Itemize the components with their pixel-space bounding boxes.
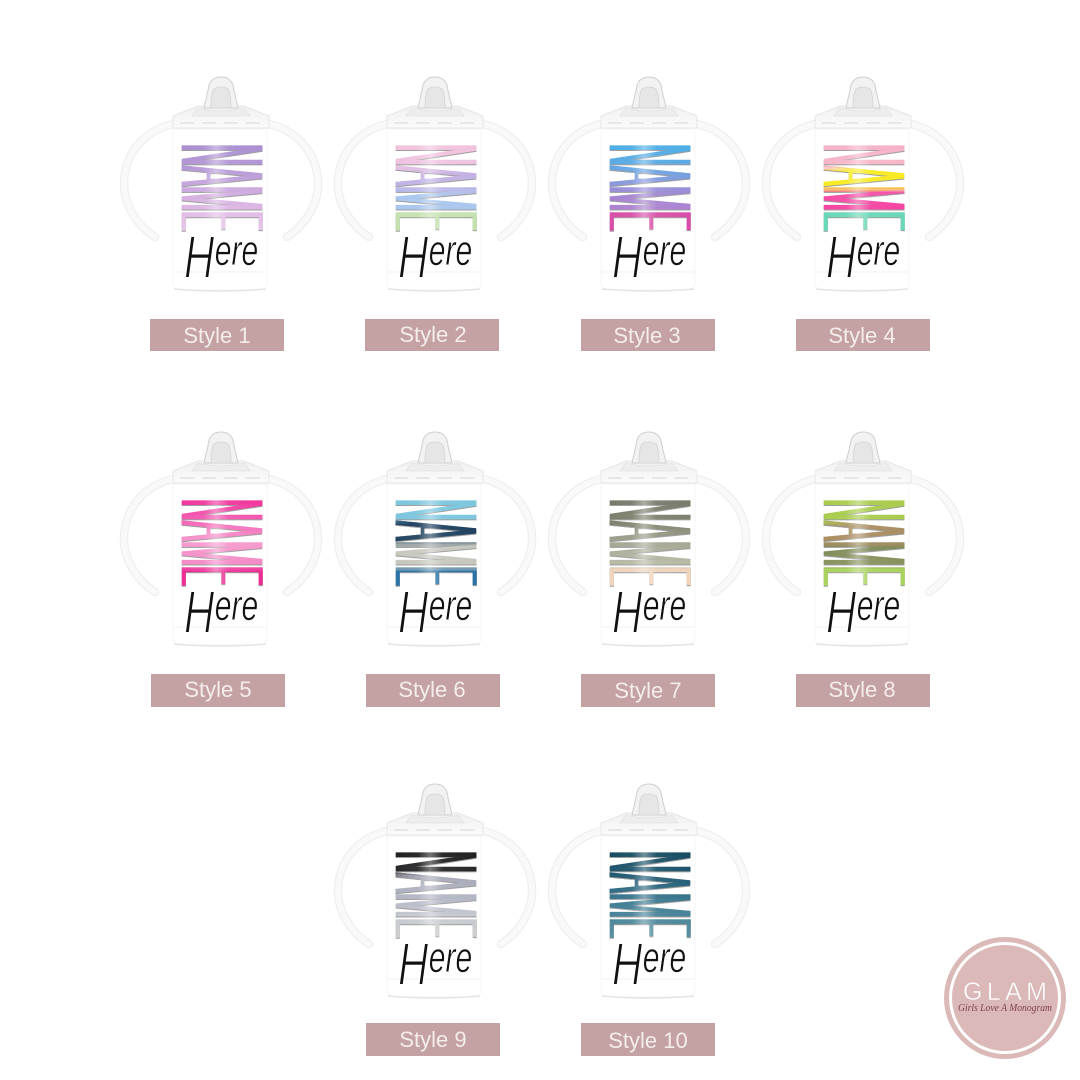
- label: style 2: Style 2: [399, 322, 467, 347]
- label: style 10: [581, 1023, 715, 1056]
- cup: style 4: [766, 77, 960, 291]
- cup: style 3: H: [612, 224, 643, 291]
- cup: style 5: H: [184, 579, 215, 646]
- cup: style 7: [552, 432, 746, 646]
- label: style 10: Style 10: [608, 1028, 688, 1053]
- label: style 3: Style 3: [613, 323, 681, 348]
- label: style 4: [796, 319, 930, 351]
- logo: GLAM badge: Girls Love A Monogram: [958, 1003, 1052, 1014]
- cup: style 8: [766, 432, 960, 646]
- label: style 5: Style 5: [184, 677, 252, 702]
- cup: style 2: H: [398, 224, 429, 291]
- cup: style 2: [338, 77, 532, 291]
- cup: style 4: H: [826, 224, 857, 291]
- label: style 7: Style 7: [614, 678, 682, 703]
- label: style 8: [796, 674, 930, 707]
- cup: style 6: [338, 432, 532, 646]
- cup: style 1: [124, 77, 318, 291]
- label: style 2: [365, 319, 499, 351]
- cup: style 9: [338, 784, 532, 998]
- cup: style 3: [552, 77, 746, 291]
- cup: style 5: ere: [215, 581, 258, 629]
- cup: style 6: H: [398, 579, 429, 646]
- cup: style 8: H: [826, 579, 857, 646]
- text: NAME: [580, 499, 719, 586]
- label: style 9: [366, 1023, 500, 1056]
- text: NAME: [580, 144, 719, 231]
- text: NAME: [152, 499, 291, 586]
- cup: style 7: ere: [643, 581, 686, 629]
- logo: GLAM badge: [944, 937, 1066, 1059]
- cup: style 8: ere: [857, 581, 900, 629]
- label: style 9: Style 9: [399, 1027, 467, 1052]
- text: NAME: [794, 144, 933, 231]
- cup: style 7: H: [612, 579, 643, 646]
- label: style 6: [366, 674, 500, 707]
- text: NAME: [794, 499, 933, 586]
- cup: style 10: H: [612, 931, 643, 998]
- cup: style 3: ere: [643, 226, 686, 274]
- cup: style 1: ere: [215, 226, 258, 274]
- cup: style 10: [552, 784, 746, 998]
- text: NAME: [152, 144, 291, 231]
- label: style 1: Style 1: [183, 323, 251, 348]
- text: NAME: [366, 499, 505, 586]
- logo: GLAM badge: GLAM: [963, 978, 1047, 1006]
- cup: style 9: H: [398, 931, 429, 998]
- label: style 6: Style 6: [398, 677, 466, 702]
- cup: style 4: ere: [857, 226, 900, 274]
- label: style 4: Style 4: [828, 323, 896, 348]
- cup: style 2: ere: [429, 226, 472, 274]
- cup: style 1: H: [184, 224, 215, 291]
- label: style 1: [150, 319, 284, 351]
- cup: style 9: ere: [429, 933, 472, 981]
- cup: style 6: ere: [429, 581, 472, 629]
- label: style 7: [581, 674, 715, 707]
- cup: style 10: ere: [643, 933, 686, 981]
- text: NAME: [366, 144, 505, 231]
- label: style 8: Style 8: [828, 677, 896, 702]
- cup: style 5: [124, 432, 318, 646]
- label: style 3: [581, 319, 715, 351]
- label: style 5: [151, 674, 285, 707]
